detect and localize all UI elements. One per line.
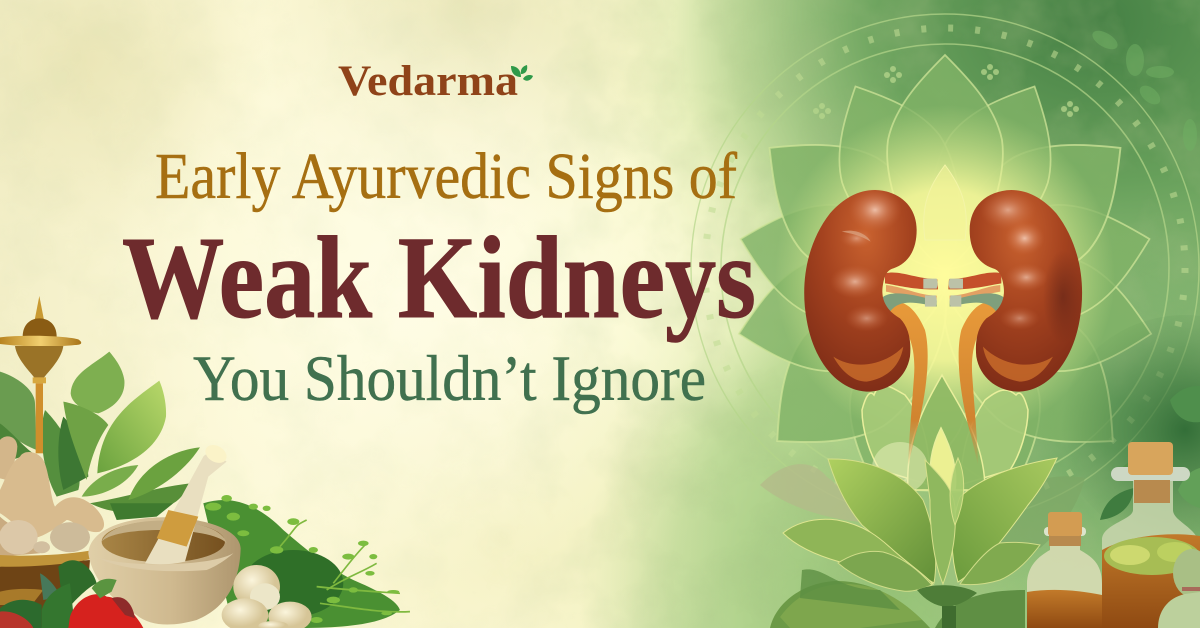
mortar xyxy=(88,441,241,624)
small bottle xyxy=(1027,512,1102,628)
flower dot clusters xyxy=(769,64,1079,165)
lotus halo petals xyxy=(727,55,1163,512)
kidney right xyxy=(948,190,1083,465)
stem base xyxy=(917,585,977,607)
left leaves xyxy=(0,352,200,520)
icon: logo leaves xyxy=(511,65,533,81)
title line 2: Weak Kidneys xyxy=(122,212,756,343)
illustration: kidneys xyxy=(804,188,1083,465)
illustration: lotus plant xyxy=(760,458,1085,628)
central glow xyxy=(775,105,1115,445)
illustration: glowing bud xyxy=(862,375,1028,494)
low mid leaf xyxy=(838,551,932,591)
garlic xyxy=(222,565,312,628)
kidney left xyxy=(804,188,938,465)
lamp xyxy=(0,296,81,453)
foliage etching top right xyxy=(1089,27,1197,151)
ginger xyxy=(0,436,104,557)
inner glow petal xyxy=(924,165,966,240)
ureter xyxy=(959,302,996,465)
herbal pouches xyxy=(1158,549,1200,628)
vessels xyxy=(948,273,1007,312)
brass bowl xyxy=(0,551,90,628)
illustration: oil bottles xyxy=(1027,442,1200,628)
large bottle xyxy=(1102,442,1200,628)
logo: Vedarma: Vedarma xyxy=(338,58,518,105)
low left leaf xyxy=(783,519,933,584)
base leaves xyxy=(770,581,930,628)
mandala rings xyxy=(691,14,1199,522)
title line 3: You Shouldn’t Ignore xyxy=(193,343,706,415)
herb sprigs xyxy=(203,495,410,628)
title line 1: Early Ayurvedic Signs of xyxy=(155,140,737,213)
center right small leaf xyxy=(950,458,964,525)
low right leaf xyxy=(960,542,1040,585)
right corner foliage xyxy=(1060,315,1200,545)
faded back leaves xyxy=(760,464,862,522)
illustration: left apothecary group xyxy=(0,296,410,628)
upper left leaf xyxy=(828,459,936,583)
dark leaves and hibiscus xyxy=(0,560,143,628)
kidney body xyxy=(804,190,917,392)
center leaf xyxy=(925,460,955,584)
ureter xyxy=(891,302,928,465)
pestle xyxy=(145,454,227,564)
upper right leaf xyxy=(952,458,1057,582)
vessels xyxy=(879,273,938,312)
kidney body xyxy=(970,190,1082,392)
